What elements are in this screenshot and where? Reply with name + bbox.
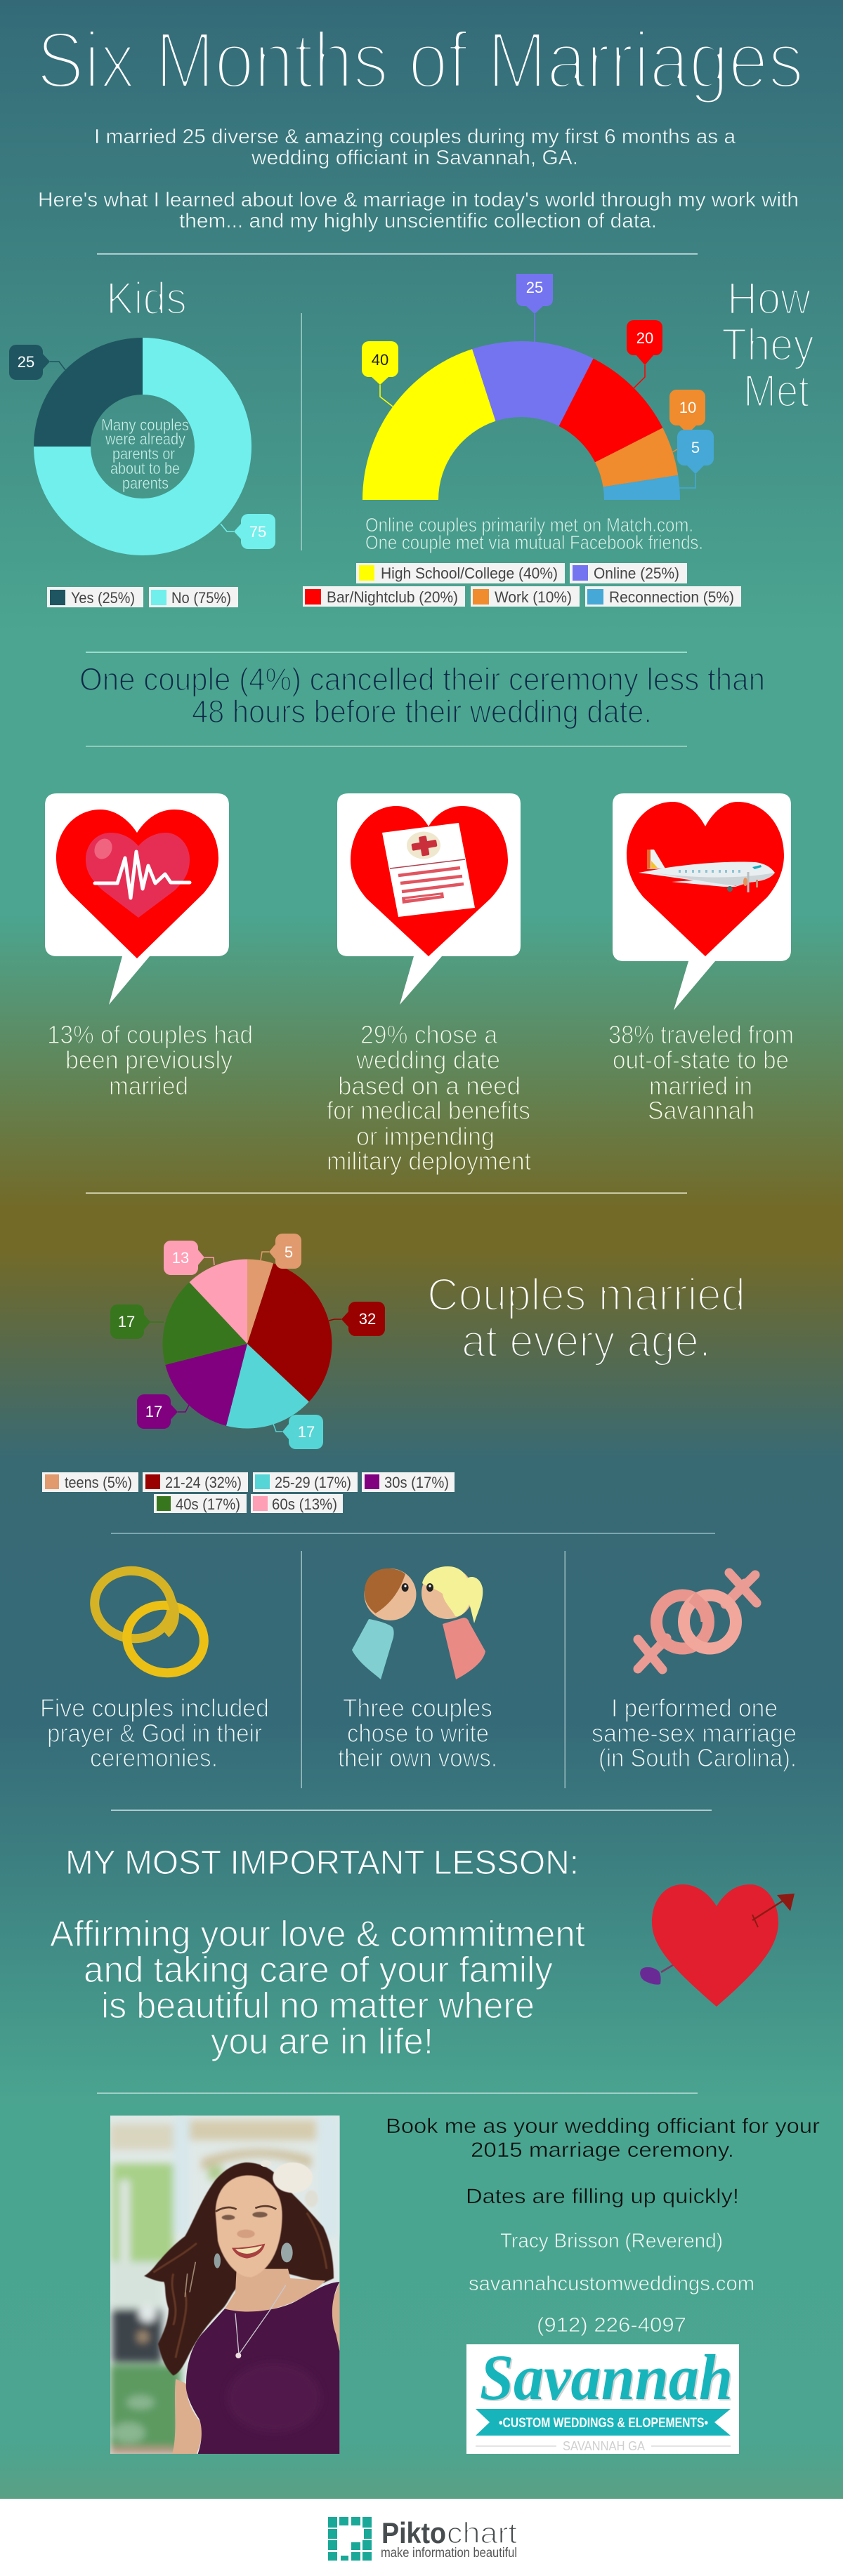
legend: kids: Yes (25%) — [71, 589, 135, 607]
donut centre note: Many couples — [101, 416, 189, 434]
note: online couples: Online couples primarily met on Match.com. — [365, 514, 693, 536]
contact details: savannahcustomweddings.com — [469, 2273, 754, 2295]
icon: wedding rings — [89, 1565, 209, 1679]
text: prayer and God — [40, 1693, 269, 1772]
icon: heart with medical form — [351, 806, 508, 956]
callout: cancelled ceremony: 48 hours before their wedding date. — [192, 694, 652, 729]
text: previously married stat: 13% of couples had — [47, 1020, 253, 1049]
panel: medical benefits — [337, 793, 521, 1005]
callout: 17 purple: 17 — [145, 1403, 162, 1420]
callout: 32: 32 — [359, 1310, 376, 1328]
callout: 17 teal: 17 — [298, 1423, 315, 1441]
callout: 25: 25 — [18, 353, 34, 371]
callout: 32 — [329, 1302, 385, 1336]
text: own vows: their own vows. — [338, 1743, 497, 1772]
callout: 13 — [164, 1241, 214, 1275]
callout: 75: 75 — [249, 523, 266, 541]
text: medical benefits stat: military deployment — [327, 1147, 531, 1175]
legend: age groups — [42, 1472, 455, 1513]
callout: 40 — [362, 341, 398, 407]
logo: Savannah Custom Weddings: SAVANNAH GA — [563, 2439, 645, 2453]
text: prayer and God: prayer & God in their — [47, 1719, 262, 1748]
intro text block: them... and my highly unscientific collection of data. — [179, 210, 657, 232]
text: previously married stat: married — [109, 1071, 188, 1100]
text: traveled stat — [608, 1020, 794, 1125]
heading: couples married at every age — [427, 1269, 745, 1366]
callout: 20 — [627, 320, 662, 389]
callout: 5 — [677, 430, 714, 488]
text: same-sex marriage — [592, 1693, 797, 1772]
note: online couples: One couple met via mutual Facebook friends. — [365, 531, 703, 553]
legend: how they met: Reconnection (5%) — [609, 588, 734, 606]
contact details: Tracy Brisson (Reverend) — [500, 2230, 723, 2252]
legend: age groups: 60s (13%) — [272, 1495, 337, 1513]
donut centre note: parents or — [112, 444, 175, 463]
lesson statement: and taking care of your family — [84, 1950, 553, 1990]
donut centre note: parents — [122, 474, 169, 492]
heading: How They Met — [721, 272, 814, 416]
text: medical benefits stat: wedding date — [355, 1045, 500, 1074]
text: prayer and God: Five couples included — [40, 1693, 269, 1722]
hair — [144, 2162, 334, 2375]
legend: how they met: High School/College (40%) — [381, 564, 558, 582]
legend: how they met: Online (25%) — [594, 564, 679, 582]
legend: how they met — [303, 563, 741, 607]
text: medical benefits stat: 29% chose a — [360, 1020, 498, 1049]
arms — [172, 2379, 202, 2454]
heading: Kids: Kids — [106, 272, 187, 324]
callout: 10 — [669, 390, 705, 452]
callout: 25 — [516, 274, 553, 342]
logo: Savannah Custom Weddings: •CUSTOM WEDDINGS & ELOPEMENTS• — [499, 2416, 708, 2431]
callout: cancelled ceremony: One couple (4%) cancelled their ceremony less than — [79, 661, 765, 697]
icon: heart with heartbeat — [56, 810, 218, 958]
text: medical benefits stat: or impending — [356, 1122, 495, 1151]
neck and chest — [225, 2269, 325, 2312]
intro text block: Here's what I learned about love & marriage in today's world through my work with — [38, 189, 799, 211]
flower — [273, 2162, 313, 2193]
callout: cancelled ceremony — [79, 661, 765, 729]
callout: 17 green: 17 — [118, 1313, 135, 1330]
legend: kids — [47, 587, 238, 607]
heading: How They Met: They — [721, 319, 814, 370]
booking text: 2015 marriage ceremony. — [471, 2139, 734, 2162]
lesson statement: you are in life! — [211, 2021, 433, 2062]
text: prayer and God: ceremonies. — [90, 1743, 218, 1772]
callout: 17 purple — [137, 1394, 189, 1429]
donut centre note — [101, 416, 189, 492]
dress — [186, 2282, 339, 2454]
icon: Piktochart tile mark — [328, 2517, 372, 2561]
legend: age groups: teens (5%) — [65, 1474, 132, 1491]
text: previously married stat: been previously — [65, 1045, 233, 1074]
icon: heart with arrow — [640, 1884, 795, 2007]
text: medical benefits stat — [327, 1020, 531, 1175]
logo: Savannah Custom Weddings: Savannah — [480, 2341, 733, 2413]
legend: how they met: Bar/Nightclub (20%) — [327, 588, 458, 606]
speech bubble — [45, 793, 229, 1005]
callout: 40: 40 — [372, 351, 388, 369]
booking text — [386, 2115, 820, 2208]
intro text block: wedding officiant in Savannah, GA. — [251, 147, 578, 169]
heading: couples married at every age: Couples married — [427, 1269, 745, 1320]
photo: Tracy Brisson portrait — [110, 2115, 339, 2455]
text: traveled stat: out-of-state to be — [613, 1045, 789, 1074]
logo: Piktochart: Pikto — [381, 2516, 446, 2549]
note: online couples — [365, 514, 703, 553]
text: traveled stat: married in — [649, 1071, 752, 1100]
donut chart: kids — [9, 338, 275, 555]
panel: previously married — [45, 793, 229, 1005]
text: previously married stat — [47, 1020, 253, 1100]
earrings — [281, 2243, 293, 2262]
logo: Piktochart: make information beautiful — [381, 2546, 517, 2561]
face — [216, 2175, 282, 2277]
text: own vows: Three couples — [343, 1693, 492, 1722]
callout: 5 — [261, 1234, 301, 1269]
callout: 25 — [9, 345, 65, 380]
necklace — [235, 2285, 286, 2354]
text: medical benefits stat: based on a need — [338, 1071, 521, 1100]
legend: age groups: 30s (17%) — [384, 1474, 449, 1491]
contact details: (912) 226-4097 — [537, 2314, 686, 2337]
lesson statement: is beautiful no matter where — [101, 1986, 535, 2026]
pie chart: couples by age — [110, 1234, 385, 1449]
icon: heart with airplane — [627, 802, 784, 956]
speech bubble — [337, 793, 521, 1005]
heading: couples married at every age: at every age. — [462, 1315, 711, 1366]
intro text block — [38, 126, 799, 232]
icon: female symbols linked — [638, 1573, 757, 1670]
heading: How They Met: Met — [743, 365, 809, 416]
text: traveled stat: Savannah — [648, 1096, 754, 1125]
legend: age groups: 25-29 (17%) — [275, 1474, 351, 1491]
lesson statement: Affirming your love & commitment — [50, 1914, 586, 1955]
text: traveled stat: 38% traveled from — [608, 1020, 794, 1049]
text: medical benefits stat: for medical benefits — [327, 1096, 530, 1125]
heading: How They Met: How — [727, 272, 811, 324]
text: own vows: chose to write — [347, 1719, 489, 1748]
speech bubble — [613, 793, 791, 1010]
callout: 75 — [221, 514, 275, 549]
logo: Savannah Custom Weddings — [466, 2341, 739, 2454]
callout: 13: 13 — [172, 1249, 189, 1267]
callout: 5: 5 — [285, 1243, 293, 1261]
text: same-sex marriage: I performed one — [611, 1693, 778, 1722]
logo: Piktochart: chart — [447, 2516, 517, 2549]
callout: 17 teal — [273, 1415, 323, 1449]
callout: 20: 20 — [636, 329, 653, 347]
footer bar — [0, 2499, 843, 2576]
legend: how they met: Work (10%) — [495, 588, 572, 606]
donut centre note: about to be — [110, 459, 180, 477]
chart: how they met half donut — [362, 274, 714, 500]
donut centre note: were already — [105, 430, 185, 448]
callout: 17 green — [110, 1304, 164, 1339]
panel: traveled out of state — [613, 793, 791, 1010]
lesson statement — [50, 1914, 586, 2062]
callout: 25: 25 — [526, 279, 543, 296]
logo: Piktochart — [328, 2516, 517, 2561]
booking text: Book me as your wedding officiant for your — [386, 2115, 820, 2138]
icon: kissing couple — [352, 1566, 485, 1679]
contact details — [469, 2230, 754, 2337]
booking text: Dates are filling up quickly! — [466, 2185, 739, 2208]
legend: kids: No (75%) — [171, 589, 231, 607]
text: same-sex marriage: (in South Carolina). — [599, 1743, 797, 1772]
text: own vows — [338, 1693, 497, 1772]
callout: 5: 5 — [691, 439, 700, 456]
legend: age groups: 40s (17%) — [176, 1495, 240, 1513]
callout: 10: 10 — [679, 399, 696, 416]
text: same-sex marriage: same-sex marriage — [592, 1719, 797, 1748]
legend: age groups: 21-24 (32%) — [165, 1474, 242, 1491]
intro text block: I married 25 diverse & amazing couples during my first 6 months as a — [94, 126, 736, 148]
heading: most important lesson: MY MOST IMPORTANT LESSON: — [65, 1844, 579, 1882]
